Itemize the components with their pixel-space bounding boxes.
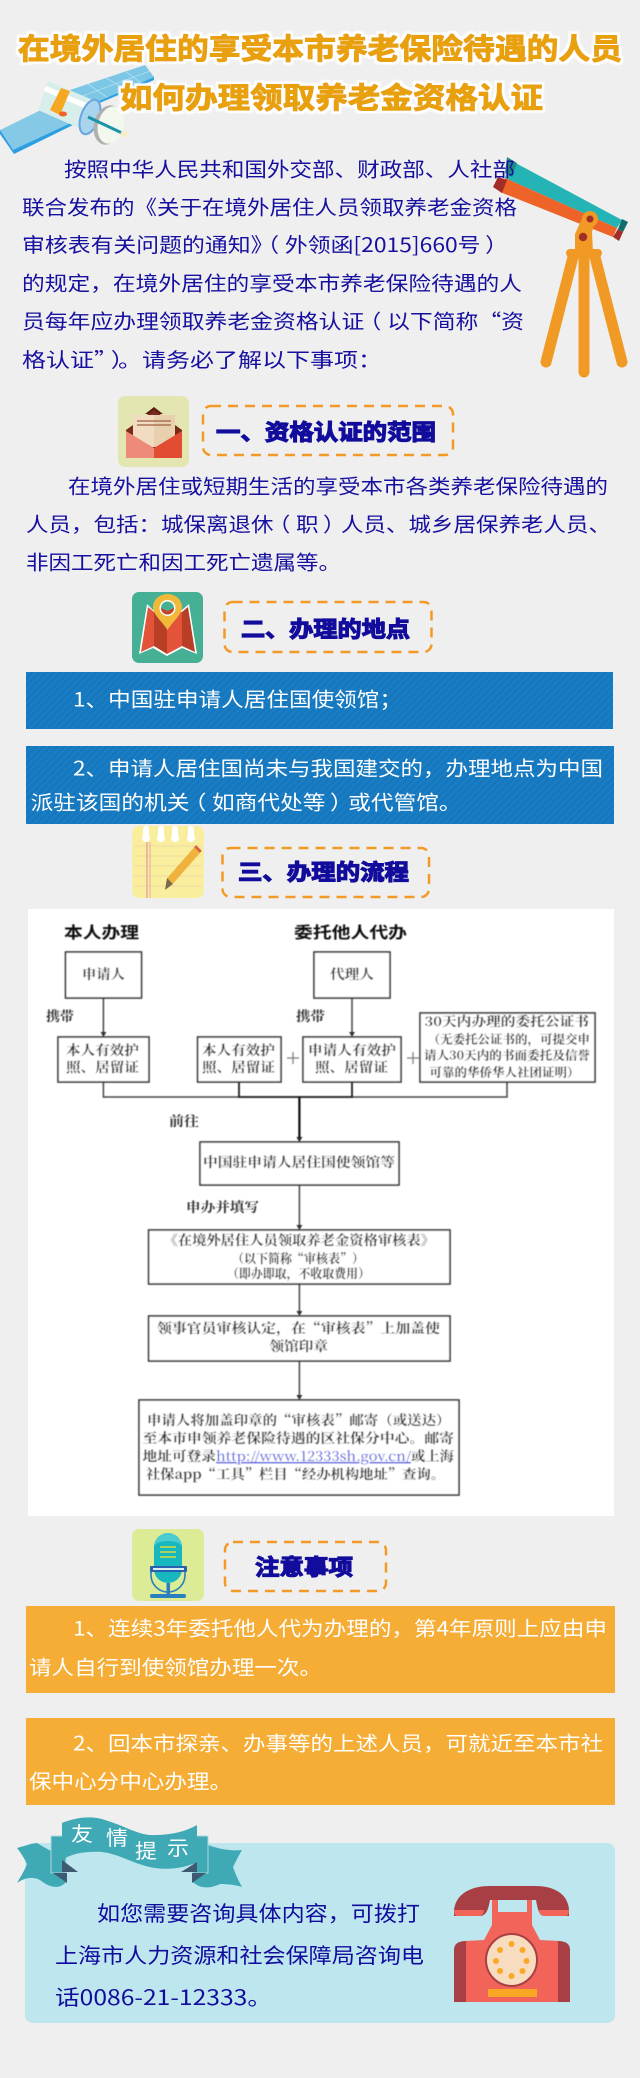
flowchart labels: 前往 bbox=[169, 1110, 200, 1130]
flowchart box: applicant bbox=[66, 952, 142, 998]
panel: location 2: 2、申请人居住国尚未与我国建交的 ，办理地点为中国 bbox=[73, 753, 603, 782]
heading: section 1: 一、资格认证的范围 bbox=[216, 415, 436, 447]
panel: friendly tip bbox=[25, 1843, 615, 2023]
ribbon text: 情 bbox=[106, 1822, 128, 1851]
panel: location 2: 派驻该国的机关 （ 如商代处等 ）或代管馆。 bbox=[31, 787, 462, 816]
flowchart labels: 携带 bbox=[296, 1005, 326, 1025]
heading: section 1 bbox=[203, 406, 453, 455]
flowchart box: form: （即办即取，不收取费用） bbox=[227, 1264, 370, 1282]
flowchart box: seal bbox=[149, 1316, 450, 1361]
icon: notepad and pencil bbox=[132, 826, 204, 898]
flowchart connectors bbox=[100, 998, 507, 1400]
panel: note 1: 请人自行到使领馆办理一次。 bbox=[29, 1652, 322, 1681]
flowchart box: agent: 代理人 bbox=[330, 963, 375, 983]
title bbox=[18, 26, 622, 117]
flowchart box: agent passport bbox=[198, 1037, 281, 1082]
tip text bbox=[55, 1898, 424, 2012]
flowchart box: applicant passport: 照、居留证 bbox=[315, 1056, 389, 1076]
intro paragraph bbox=[22, 154, 524, 373]
flowchart box: agent bbox=[314, 952, 390, 998]
ribbon text: 示 bbox=[167, 1832, 189, 1861]
intro paragraph: 审核表有关问题的通知》 （ 外领函[2015]660号 ） bbox=[22, 229, 508, 258]
panel: note 2: 保中心分中心办理。 bbox=[29, 1766, 232, 1795]
intro paragraph: 格认证” ）。请务必了解以下事项 ： bbox=[22, 344, 382, 373]
intro paragraph: 员每年应办理领取养老金资格认证 （ 以下简称“资 bbox=[22, 306, 524, 335]
ribbon text: 提 bbox=[135, 1835, 157, 1864]
icon: map pin bbox=[132, 592, 203, 663]
section 1 text bbox=[26, 471, 611, 576]
flowchart labels: 申办并填写 bbox=[186, 1196, 260, 1216]
heading: section 2: 二、办理的地点 bbox=[241, 612, 410, 644]
flowchart box: own passport: 本人有效护 bbox=[66, 1039, 140, 1059]
heading: section 2 bbox=[224, 602, 432, 652]
flowchart box: applicant: 申请人 bbox=[82, 963, 126, 983]
panel: location 1: 1、中国驻申请人居住国使领馆 ； bbox=[73, 684, 402, 713]
flowchart box: notarised power of attorney bbox=[420, 1011, 595, 1082]
flowchart box: mail form: 至本市申领养老保险待遇的区社保分中心。邮寄 bbox=[142, 1427, 455, 1447]
icon: envelope bbox=[118, 396, 189, 467]
flowchart box: mail form: 地址可登录 bbox=[142, 1445, 217, 1465]
flowchart box: mail form: 申请人将加盖印章的“审核表”邮寄（或送达） bbox=[147, 1409, 450, 1429]
intro paragraph: 的规定 ，在境外居住的享受本市养老保险待遇的人 bbox=[22, 268, 522, 297]
flowchart box: agent passport: 照、居留证 bbox=[202, 1056, 276, 1076]
flowchart box: mail form: 或上海 bbox=[411, 1445, 455, 1465]
section 1 text: 人员，包括：城保离退休 （ 职 ）人员、城乡居保养老人员、 bbox=[26, 509, 611, 538]
flowchart box: seal: 领事官员审核认定，在“审核表”上加盖使 bbox=[157, 1317, 441, 1337]
flowchart box: mail form: 社保app“工具”栏目“经办机构地址”查询。 bbox=[146, 1463, 445, 1483]
section 1 text: 在境外居住或短期生活的享受本市各类养老保险待遇的 bbox=[68, 471, 608, 500]
title: 如何办理领取养老金资格认证 bbox=[120, 75, 543, 117]
flowchart column titles bbox=[64, 919, 407, 943]
section 1 text: 非因工死亡和因工死亡遗属等。 bbox=[26, 547, 341, 576]
heading: notes bbox=[225, 1542, 386, 1591]
flowchart box: notarised power of attorney: 请人30天内的书面委托及信誉 bbox=[424, 1046, 590, 1064]
ribbon text: 友 bbox=[71, 1818, 93, 1847]
flowchart box: mail form bbox=[139, 1400, 459, 1495]
title: 在境外居住的享受本市养老保险待遇的人员 bbox=[18, 26, 622, 68]
flowchart box: notarised power of attorney: 可靠的华侨华人社团证明） bbox=[430, 1064, 580, 1080]
icon: telescope bbox=[493, 157, 628, 372]
flowchart box: applicant passport: 申请人有效护 bbox=[308, 1039, 397, 1059]
tip text: 上海市人力资源和社会保障局咨询电 bbox=[55, 1940, 424, 1970]
flowchart labels bbox=[46, 1005, 326, 1216]
intro paragraph: 按照中华人民共和国外交部、财政部、人社部 bbox=[64, 154, 515, 183]
flowchart box: consulate bbox=[200, 1142, 399, 1185]
flowchart box: own passport: 照、居留证 bbox=[66, 1056, 140, 1076]
panel: process flowchart bbox=[28, 909, 614, 1516]
heading: section 3 bbox=[222, 848, 429, 897]
icon: microphone bbox=[132, 1529, 204, 1601]
flowchart labels: 携带 bbox=[46, 1005, 75, 1025]
flowchart box: consulate: 中国驻申请人居住国使领馆等 bbox=[203, 1151, 396, 1171]
icon: satellite bbox=[0, 65, 154, 154]
flowchart box: form: （以下简称“审核表”） bbox=[232, 1249, 364, 1267]
panel: note 1: 1、连续3年委托他人代为办理的 ，第4年原则上应由申 bbox=[73, 1613, 607, 1642]
flowchart box: mail form: http://www.12333sh.gov.cn/ bbox=[216, 1445, 411, 1465]
icon: telephone bbox=[454, 1886, 570, 2002]
heading: notes: 注意事项 bbox=[255, 1550, 353, 1582]
flowchart box: own passport bbox=[58, 1037, 149, 1082]
flowchart plus signs bbox=[287, 1052, 419, 1064]
flowchart box: form bbox=[149, 1229, 450, 1284]
flowchart column titles: 委托他人代办 bbox=[294, 919, 407, 943]
panel: note 1 bbox=[26, 1606, 615, 1693]
flowchart column titles: 本人办理 bbox=[64, 919, 139, 943]
flowchart box: seal: 领馆印章 bbox=[270, 1335, 329, 1355]
flowchart box: form: 《在境外居住人员领取养老金资格审核表》 bbox=[164, 1229, 435, 1249]
panel: note 2: 2、回本市探亲、办事等的上述人员 ，可就近至本市社 bbox=[73, 1728, 603, 1757]
flowchart box: notarised power of attorney: 30天内办理的委托公证书 bbox=[424, 1011, 590, 1030]
intro paragraph: 联合发布的《关于在境外居住人员领取养老金资格 bbox=[22, 192, 517, 221]
heading: section 3: 三、办理的流程 bbox=[238, 855, 409, 887]
panel: note 2 bbox=[26, 1718, 615, 1805]
flowchart box: agent passport: 本人有效护 bbox=[202, 1039, 276, 1059]
tip text: 话0086-21-12333。 bbox=[55, 1982, 272, 2012]
ribbon text bbox=[71, 1818, 189, 1864]
flowchart box: applicant passport bbox=[303, 1037, 401, 1082]
flowchart box: notarised power of attorney: （无委托公证书的，可提交申 bbox=[428, 1030, 590, 1048]
panel: location 2 bbox=[26, 746, 614, 824]
ribbon: friendly tip bbox=[17, 1817, 242, 1887]
tip text: 如您需要咨询具体内容 ，可拨打 bbox=[97, 1898, 420, 1928]
panel: location 1 bbox=[26, 672, 613, 729]
